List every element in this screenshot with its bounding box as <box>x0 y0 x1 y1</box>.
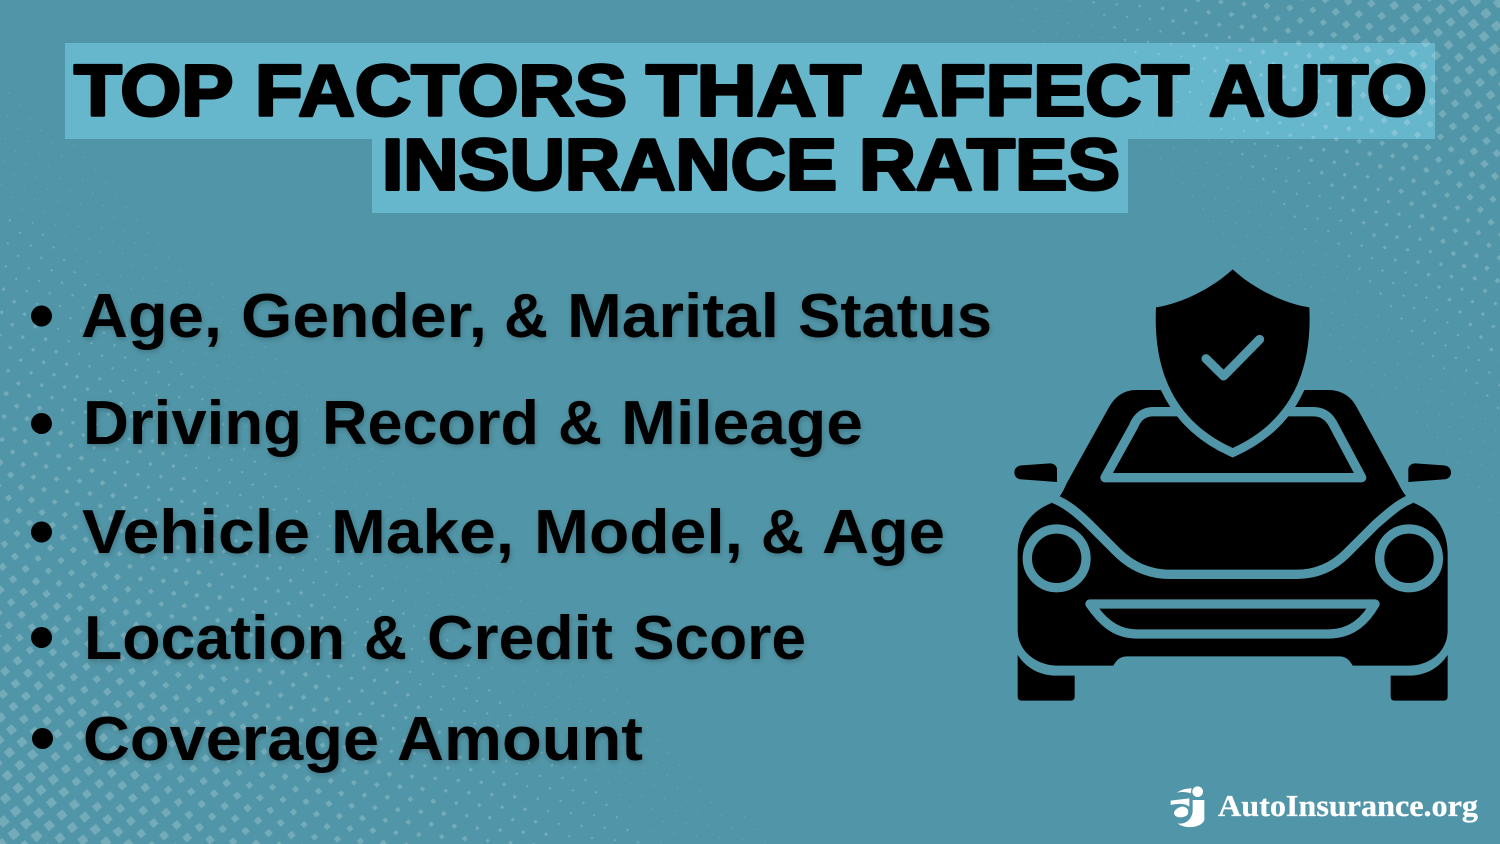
list item: location, credit score <box>31 604 806 673</box>
list item: driving record, mileage: & <box>558 389 602 458</box>
bullet list of rating factors <box>31 282 992 774</box>
list item: location, credit score: Credit <box>427 604 613 673</box>
logo wordmark: AutoInsurance.org <box>1218 788 1479 823</box>
title: RATES <box>859 126 1120 206</box>
list item: age, gender, marital status: Status <box>798 282 992 351</box>
title: TOP <box>74 52 232 132</box>
title: INSURANCE <box>382 126 837 206</box>
list item: location, credit score: & <box>364 604 407 673</box>
list item: coverage amount <box>32 705 643 774</box>
list item: coverage amount: Amount <box>397 705 643 774</box>
list item: driving record, mileage <box>31 389 863 458</box>
list item: age, gender, marital status <box>31 282 992 351</box>
list item: vehicle make, model, age: Age <box>822 498 945 567</box>
list item: vehicle make, model, age: Vehicle <box>82 498 310 567</box>
logo: AutoInsurance.org <box>1171 786 1479 827</box>
logo mark <box>1171 786 1204 827</box>
title: AFFECT <box>882 52 1189 132</box>
list item: age, gender, marital status: & <box>504 282 548 351</box>
title highlight bands <box>65 43 1435 213</box>
list item: age, gender, marital status: Marital <box>567 282 779 351</box>
list item: location, credit score: Location <box>84 604 345 673</box>
list item: driving record, mileage: Driving <box>83 389 302 458</box>
list item: vehicle make, model, age: Model, <box>534 498 743 567</box>
car mirrors <box>1014 463 1451 482</box>
title: THAT <box>646 52 861 132</box>
car wheels <box>1018 655 1448 701</box>
list item: location, credit score: Score <box>633 604 806 673</box>
list item: driving record, mileage: Record <box>322 389 539 458</box>
list item: coverage amount: Coverage <box>83 705 379 774</box>
title <box>74 52 1427 206</box>
list item: vehicle make, model, age: Make, <box>331 498 514 567</box>
list item: vehicle make, model, age: & <box>761 498 804 567</box>
shield <box>1156 269 1310 448</box>
title: AUTO <box>1209 52 1427 132</box>
car body <box>1018 390 1448 666</box>
icon: car with protective shield <box>1014 269 1451 701</box>
list item: age, gender, marital status: Gender, <box>241 282 487 351</box>
car details: hood line, windshield, headlights, grille <box>1027 412 1438 634</box>
check mark <box>1206 339 1260 376</box>
title: FACTORS <box>255 52 627 132</box>
list item: age, gender, marital status: Age, <box>81 282 222 351</box>
list item: driving record, mileage: Mileage <box>621 389 863 458</box>
list item: vehicle make, model, age <box>31 498 945 567</box>
